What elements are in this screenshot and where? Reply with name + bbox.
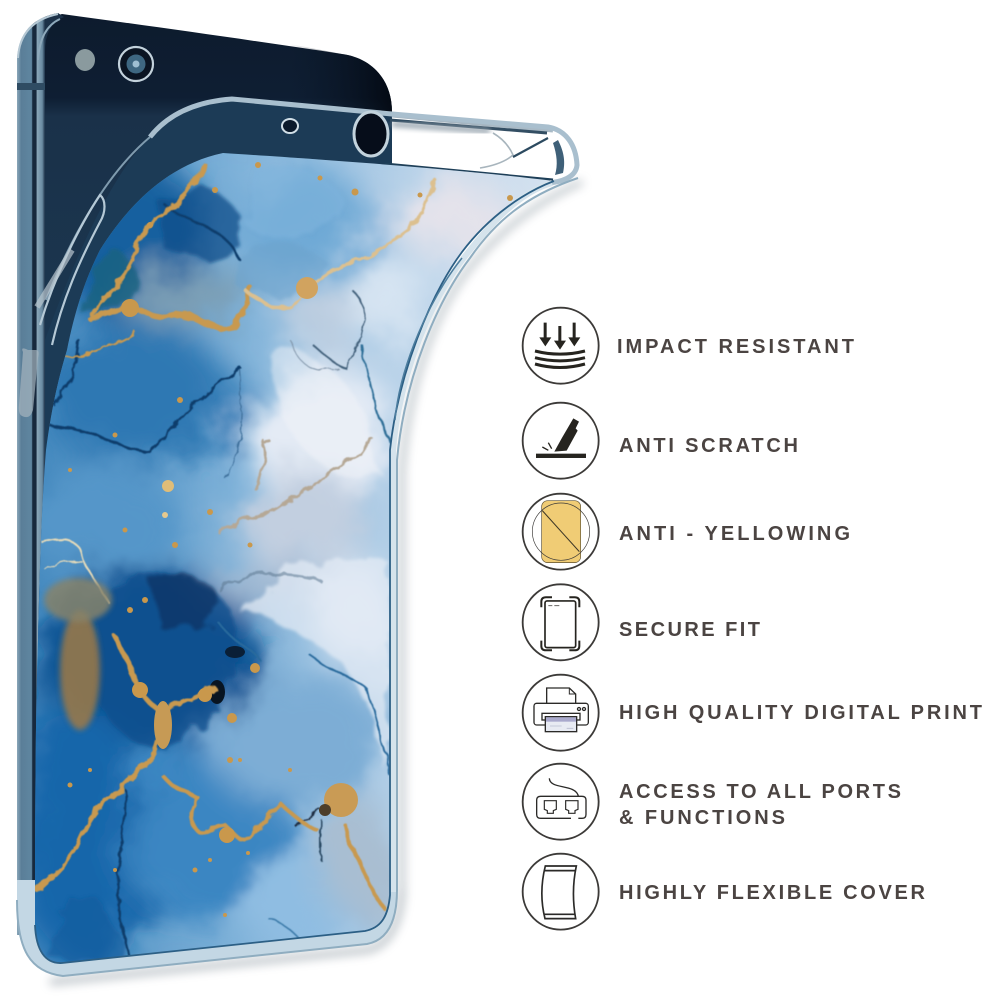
case flash hole [282,119,298,133]
black ink blot [209,680,225,704]
case window over white [392,121,552,176]
feature: anti scratch [523,403,798,479]
label [619,781,901,829]
icon: yellow phone crossed [523,494,599,570]
label: IMPACT RESISTANT [617,336,854,358]
feature: secure fit [523,584,760,660]
flash [75,49,95,71]
icon: impact arrows [523,308,599,384]
icon: bent case [523,854,599,930]
case side button cutout [40,195,104,345]
icon: printer [523,675,599,751]
phone metal side rail [17,13,64,935]
label: SECURE FIT [619,619,760,641]
tinted case back panel [38,99,392,640]
feature: flexible cover [523,854,926,930]
case lower rim [17,178,578,976]
gold patches and splashes [44,162,513,917]
icon: ethernet ports [523,764,599,840]
dark ink veins [50,205,390,960]
label: ANTI - YELLOWING [619,523,850,545]
gold veins [37,165,435,908]
rail side keys seen through case [19,250,72,417]
camera lens [119,47,153,81]
icon: blade scratching surface [523,403,599,479]
marble print [0,130,600,990]
feature: ports access [523,764,901,840]
icon: phone with corner bumpers [523,584,599,660]
case drop shadow [50,182,582,982]
label: ANTI SCRATCH [619,435,798,457]
label: HIGH QUALITY DIGITAL PRINT [619,702,982,724]
feature: digital print [523,675,982,751]
phone body [17,13,392,935]
label: HIGHLY FLEXIBLE COVER [619,882,926,904]
label: ACCESS TO ALL PORTS [619,781,901,803]
feature: impact resistant [523,308,854,384]
feature: anti yellowing [523,494,850,570]
transparent case [19,99,577,640]
case camera hole [354,112,388,156]
label: & FUNCTIONS [619,807,785,829]
